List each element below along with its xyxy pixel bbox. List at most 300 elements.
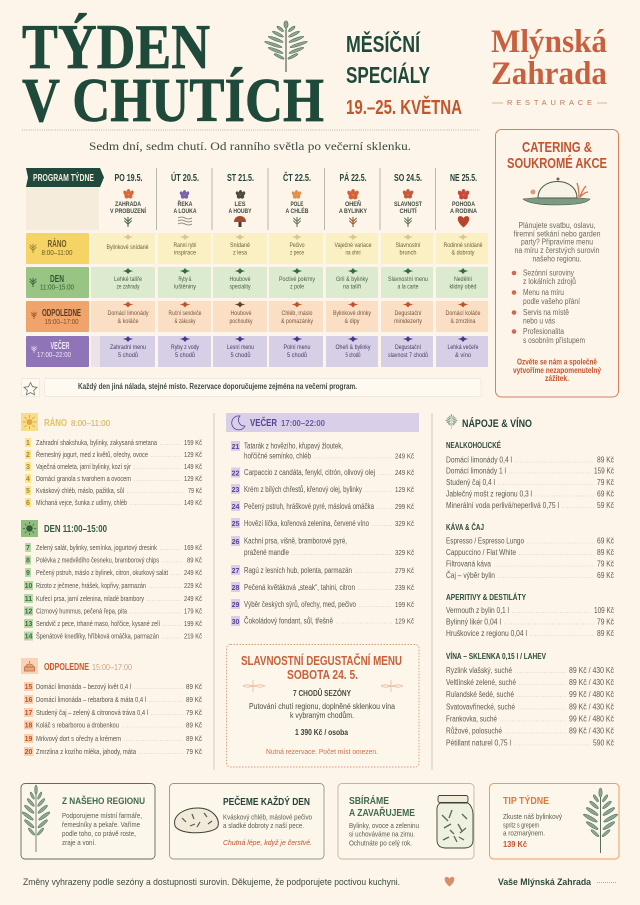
card: tip of the week	[490, 784, 619, 859]
row: afternoon: Degustační	[394, 310, 422, 317]
card: baking	[170, 784, 324, 859]
row: day: DEN	[50, 273, 64, 285]
day headers: ST 21.5.	[227, 172, 254, 184]
tasting description: k vybraným chodům.	[290, 711, 354, 720]
row: evening	[26, 336, 488, 367]
tasting price: 1 390 Kč / osoba	[295, 728, 348, 737]
restaurant logo: Mlýnská	[491, 24, 607, 60]
day headers: ÚT 20.5.	[171, 171, 199, 184]
row: day: Slavnostní menu	[388, 276, 428, 283]
wines: 89 Kč / 430 Kč	[569, 702, 614, 712]
coffee and tea: Espresso / Espresso Lungo	[446, 536, 524, 546]
menu item 8: 89 Kč	[187, 556, 202, 564]
coffee and tea: Filtrovaná káva	[446, 560, 491, 568]
soft drinks: Studený čaj 0,4 l	[446, 478, 495, 487]
soft drinks: 59 Kč	[597, 501, 614, 510]
preserving text	[349, 821, 419, 848]
tip price: 139 Kč	[503, 840, 528, 849]
drinks heading: NÁPOJE & VÍNO	[462, 417, 532, 430]
menu item 6: Míchaná vejce, šunka z udírny, chléb	[36, 498, 127, 507]
row: day	[26, 267, 488, 298]
aperitifs: Hruškovice z regionu 0,04 l	[446, 629, 527, 638]
day theme icons and names: ZAHRADA	[115, 201, 141, 208]
title: TÝDEN	[22, 11, 210, 82]
menu item 1: 1	[26, 440, 30, 447]
row: afternoon: Ruční sendviče	[168, 310, 202, 317]
region text: řemeslníky a pekaře. Vaříme	[62, 820, 140, 829]
wines: 99 Kč / 480 Kč	[569, 714, 614, 724]
menu item 3: Vaječná omeleta, jarní bylinky, kozí sýr	[36, 462, 131, 471]
menu item 30: 129 Kč	[395, 616, 414, 626]
menu item 10: Rizoto z ječmene, hrášek, kopřivy, parmazán	[36, 581, 146, 590]
row: afternoon: minidezerty	[394, 318, 423, 325]
icon: cake	[21, 658, 38, 674]
menu item 9: 249 Kč	[184, 568, 202, 577]
menu item 29: 29	[232, 602, 239, 609]
tip title: TIP TÝDNE	[503, 794, 549, 807]
panel: evening menu	[226, 413, 419, 626]
catering benefits list: podle vašeho přání	[523, 297, 581, 306]
day theme icons and names: A RODINA	[450, 208, 477, 215]
panel: afternoon menu	[21, 658, 202, 756]
tasting title: SOBOTA 24. 5.	[287, 668, 358, 682]
aperitifs: APERITIVY & DESTILÁTY	[446, 592, 526, 602]
menu item 29: Výběr českých sýrů, ořechy, med, pečivo	[244, 600, 356, 609]
menu item 22: 249 Kč	[395, 468, 414, 477]
baking text: Kváskový chléb, máslové pečivo	[223, 812, 312, 822]
aperitifs: Bylinný likér 0,04 l	[446, 618, 501, 626]
preserving title	[349, 794, 415, 819]
catering benefits list: nebo u vás	[523, 316, 555, 326]
menu item 5: 79 Kč	[188, 486, 202, 495]
menu item 17: 79 Kč	[186, 708, 202, 717]
menu item 6: 149 Kč	[184, 498, 202, 507]
day headers: PO 19.5.	[114, 172, 143, 184]
menu item 5: Kváskový chléb, máslo, pažitka, sůl	[36, 486, 124, 495]
menu item 11: Kuřecí prsa, jarní zelenina, mladé brambory	[36, 594, 144, 603]
menu item 21: hořčičné semínko, chléb	[244, 452, 311, 460]
row: day: z pole	[290, 284, 304, 290]
soft drinks: Jablečný mošt z regionu 0,3 l	[446, 490, 532, 498]
catering benefits list: Menu na míru	[523, 288, 564, 297]
menu item 22: 22	[232, 470, 239, 478]
tasting title: SLAVNOSTNÍ DEGUSTAČNÍ MENU	[241, 653, 402, 668]
row: afternoon: & dipy	[344, 318, 360, 325]
row: day: Poctivé pokrmy	[279, 276, 316, 283]
menu item 22: Carpaccio z candáta, fenykl, citrón, olivový olej	[244, 468, 375, 477]
panel: morning menu	[21, 413, 202, 507]
wines: 89 Kč / 430 Kč	[569, 726, 614, 736]
row: morning: Bylinkové snídaně	[106, 244, 149, 251]
catering benefits list	[512, 268, 585, 345]
menu item 16: Domácí limonáda – rebarbora & máta 0,4 l	[36, 695, 146, 704]
evening header: 17:00–22:00	[281, 418, 325, 428]
menu item 29: 199 Kč	[395, 600, 414, 609]
restaurant logo: Zahrada	[491, 56, 607, 92]
row: day: Nedělní	[454, 276, 472, 283]
row: evening: 5 chodů	[175, 351, 195, 359]
row: afternoon: Bylinkové drinky	[333, 310, 372, 317]
row: evening: slavnost 7 chodů	[388, 351, 428, 359]
menu item 13: Sendvič z pece, trhané maso, hořčice, kysané zelí	[36, 619, 161, 628]
menu item 28: 28	[232, 585, 239, 592]
menu item 14: 14	[25, 634, 32, 640]
catering benefits list: s osobním přístupem	[523, 336, 585, 345]
day heading: DEN 11:00–15:00	[44, 524, 107, 535]
row: morning: Vaječné variace	[334, 242, 372, 249]
menu item 26: 26	[232, 539, 239, 546]
row: afternoon: ODPOLEDNE	[42, 307, 81, 319]
panel: day menu	[21, 520, 202, 640]
wines: Ryzlink vlašský, suché	[446, 666, 512, 675]
row: day: Houbové	[230, 276, 251, 283]
menu item 24: 299 Kč	[395, 502, 414, 511]
menu item 26: 329 Kč	[395, 548, 414, 557]
restaurant logo	[491, 24, 607, 107]
region title: Z NAŠEHO REGIONU	[62, 795, 145, 807]
row: evening: & víno	[455, 352, 471, 359]
title: V CHUTÍCH	[22, 67, 324, 135]
panel: catering	[496, 130, 618, 397]
menu item 1: 159 Kč	[184, 438, 202, 447]
preserving text: Bylinky, ovoce a zeleninu	[349, 821, 419, 830]
coffee and tea	[446, 521, 614, 580]
row: evening: VEČER	[50, 339, 70, 352]
row: day: Lehké talíře	[114, 276, 142, 283]
icon: day sun	[21, 520, 38, 537]
aperitifs: 109 Kč	[594, 606, 614, 615]
baking tagline: Chutná lépe, když je čerstvé.	[223, 838, 312, 847]
row: evening: Ryby z vody	[171, 344, 200, 351]
menu item 21: 21	[232, 444, 239, 451]
catering description: na míru z čerstvých surovin	[514, 246, 600, 255]
menu item 10: 229 Kč	[184, 581, 202, 590]
menu item 3: 149 Kč	[184, 462, 202, 471]
row: afternoon: pochoutky	[230, 318, 253, 325]
row: evening: Degustační	[395, 344, 421, 351]
menu item 25: 329 Kč	[395, 519, 414, 528]
preserving text: Ochutnáte po celý rok.	[349, 838, 412, 848]
aperitifs: Vermouth z bylin 0,1 l	[446, 606, 509, 615]
wines: Rulandské šedé, suché	[446, 690, 514, 699]
icon: rosemary sprig	[583, 788, 618, 853]
monthly specials heading: MĚSÍČNÍ	[346, 30, 420, 57]
menu item 20: Zmrzlina z kozího mléka, jahody, máta	[36, 747, 137, 756]
panel: weekly program table	[26, 168, 488, 367]
row: afternoon: & pomazánky	[281, 318, 314, 325]
row: evening: Lehká večeře	[448, 344, 479, 351]
menu item 13: 13	[25, 621, 32, 628]
footer	[23, 877, 617, 888]
menu item 6: 6	[26, 500, 30, 507]
menu item 27: 27	[232, 568, 239, 575]
day theme icons and names: OHEŇ	[345, 199, 361, 208]
menu item 30	[231, 616, 414, 626]
row: morning: Snídaně	[230, 242, 250, 249]
icon: wheat sprig	[21, 785, 51, 852]
menu item 25: 25	[232, 521, 239, 528]
menu item 28: Pečená květáková „steak“, tahini, citron	[244, 583, 355, 592]
menu item 13: 199 Kč	[184, 619, 202, 628]
monthly specials heading: SPECIÁLY	[346, 61, 430, 88]
menu item 26: pražené mandle	[244, 548, 289, 557]
row: morning: RÁNO	[48, 237, 66, 250]
row: evening: Zahradní menu	[110, 344, 146, 351]
wines: Růžové, polosuché	[446, 726, 502, 736]
soft drinks: 79 Kč	[597, 478, 614, 487]
menu item 21: Tatarák z hovězího, křupavý žloutek,	[244, 442, 343, 450]
wines: 99 Kč / 480 Kč	[569, 690, 614, 699]
baking text: a sladké dobroty z naší pece.	[223, 821, 304, 830]
icon: herb	[445, 414, 458, 429]
row: morning: & dobroty	[452, 250, 475, 256]
row: morning: Slavnostní	[396, 242, 421, 249]
tasting title	[241, 653, 402, 682]
menu item 12: 12	[25, 608, 32, 616]
menu item 23: Krém z bílých chřestů, křenový olej, bylinky	[244, 485, 362, 494]
afternoon heading: 15:00–17:00	[92, 662, 132, 672]
menu item 20: 79 Kč	[186, 747, 202, 756]
catering description: party? Připravíme menu	[521, 238, 593, 247]
menu item 27: Ragú z lesních hub, polenta, parmazán	[244, 566, 352, 575]
day headers: ČT 22.5.	[283, 171, 311, 184]
row: evening: 5 chodů	[287, 351, 307, 359]
note bar	[22, 378, 481, 396]
menu item 7: Zelený salát, bylinky, semínka, jogurtový dresink	[36, 543, 157, 552]
tip text: a rozmarýnem.	[503, 828, 545, 838]
tasting description	[249, 702, 396, 720]
region text: Podporujeme místní farmáře,	[62, 811, 142, 820]
afternoon heading: ODPOLEDNE	[44, 662, 89, 673]
row: afternoon: & koláče	[118, 318, 139, 325]
menu item 7: 169 Kč	[184, 543, 202, 552]
row: evening: 5 chodů	[118, 351, 138, 359]
preserving text: si uchováváme na zimu.	[349, 830, 415, 838]
wines: Frankovka, suché	[446, 714, 497, 724]
catering heading: SOUKROMÉ AKCE	[507, 155, 607, 172]
menu item 19: 89 Kč	[186, 734, 202, 743]
menu item 2: 129 Kč	[184, 450, 202, 459]
catering description: Plánujete svatbu, oslavu,	[518, 221, 596, 230]
catering description: našeho regionu.	[532, 254, 582, 264]
menu item 28	[231, 582, 414, 592]
wines: Veltlínské zelené, suché	[446, 678, 516, 687]
coffee and tea: 69 Kč	[597, 571, 614, 580]
row: evening: 5 chodů	[230, 351, 251, 359]
row: morning: na ohni	[346, 250, 361, 256]
menu item 17: Studený čaj – zelený & citronová tráva 0,4 l	[36, 708, 148, 717]
day headers: PÁ 22.5.	[340, 171, 367, 184]
menu item 8: Polévka z medvědího česneku, bramborový chips	[36, 556, 159, 564]
row: evening: 5 chodů	[346, 351, 361, 359]
menu item 5: 5	[26, 488, 30, 495]
day headers	[114, 171, 477, 184]
menu item 17: 17	[25, 710, 32, 717]
soft drinks: NEALKOHOLICKÉ	[446, 440, 501, 450]
morning heading	[44, 416, 110, 429]
row: morning: Rodinné snídaně	[444, 242, 483, 249]
menu item 4: 4	[26, 476, 30, 483]
menu item 18	[24, 720, 202, 730]
menu item 14: 219 Kč	[184, 632, 202, 640]
wines: 89 Kč / 430 Kč	[569, 678, 614, 687]
catering description	[514, 221, 600, 264]
menu item 14: Špenátové knedlíky, hříbková omáčka, parmazán	[36, 632, 159, 640]
card: from our region	[21, 784, 155, 859]
baking title: PEČEME KAŽDÝ DEN	[223, 795, 310, 808]
menu item 18: 18	[25, 722, 32, 730]
menu item 6	[25, 498, 202, 507]
ornaments	[243, 680, 403, 692]
catering call to action: zážitek.	[545, 374, 569, 383]
evening header: VEČER	[250, 416, 278, 429]
menu item 21	[231, 441, 414, 460]
icon: bread	[175, 808, 218, 833]
row: day: a la carte	[398, 284, 419, 290]
day headers: SO 24.5.	[394, 172, 422, 184]
day theme icons and names: V PROBUZENÍ	[110, 206, 147, 215]
menu item 15: Domácí limonáda – bezový květ 0,4 l	[36, 682, 131, 691]
menu item 26	[231, 536, 414, 557]
catering heading	[507, 139, 607, 172]
wines	[446, 651, 614, 748]
aperitifs: 79 Kč	[597, 618, 614, 626]
menu item 11: 11	[25, 596, 32, 603]
row: day: luštěniny	[174, 284, 197, 290]
coffee and tea: 79 Kč	[597, 560, 614, 568]
menu item 27: 279 Kč	[395, 566, 414, 575]
menu item 18: Koláč s rebarborou a drobenkou	[36, 720, 119, 730]
icon: jar	[437, 796, 473, 848]
menu item 2: Řemeslný jogurt, med z květů, ořechy, ovoce	[36, 450, 148, 459]
preserving title: A ZAVAŘUJEME	[349, 806, 415, 819]
catering call to action	[513, 358, 602, 383]
subtitle: Sedm dní, sedm chutí. Od ranního světla po večerní sklenku.	[89, 139, 411, 153]
menu item 19: Mrkvový dort s ořechy a krémem	[36, 734, 121, 743]
row: afternoon: & zmrzlina	[450, 318, 476, 325]
menu item 18: 89 Kč	[186, 720, 202, 730]
menu item 21: 249 Kč	[395, 452, 414, 460]
soft drinks: Domácí limonády 1 l	[446, 466, 506, 476]
menu item 9: 9	[26, 570, 30, 577]
menu item 12: Cizrnový hummus, pečená řepa, pita	[36, 606, 128, 616]
row: afternoon: & zákusky	[174, 318, 196, 325]
row: day: klidný oběd	[450, 284, 477, 290]
row: evening: Lesní menu	[227, 344, 254, 351]
card: preserving	[338, 784, 474, 859]
row: morning: z lesa	[233, 250, 247, 256]
menu item 16: 16	[25, 697, 32, 704]
signature: Vaše Mlýnská Zahrada	[498, 877, 592, 888]
row: evening: Oheň & bylinky	[336, 344, 371, 351]
icon: sun	[21, 413, 38, 431]
soft drinks: 69 Kč	[597, 490, 614, 498]
menu item 24: Pečený pstruh, hráškové pyré, máslová omáčka	[244, 502, 374, 511]
catering benefits list: Sezónní suroviny	[523, 268, 574, 278]
catering benefits list: z lokálních zdrojů	[523, 277, 576, 286]
menu item 9: Pečený pstruh, máslo z bylinek, citron, okurkový salát	[36, 568, 169, 577]
morning heading: 8:00–11:00	[71, 418, 110, 428]
day theme icons and names: A CHLÉB	[286, 206, 309, 215]
evening header	[226, 413, 419, 432]
row: morning: Ranní rybí	[174, 242, 197, 249]
row: day: ze zahrady	[116, 284, 140, 290]
note bar: Každý den jiná nálada, stejné místo. Rezervace doporučujeme zejména na večerní program.	[78, 382, 357, 391]
tasting note: Nutná rezervace. Počet míst omezen.	[266, 747, 378, 756]
menu item 19: 19	[25, 736, 32, 743]
region text: zraje a voní.	[62, 838, 96, 847]
day theme icons and names: LES	[234, 201, 246, 208]
wines: VÍNA – SKLENKA 0,15 l / LAHEV	[446, 651, 546, 661]
catering description: firemní setkání nebo garden	[514, 230, 600, 238]
row: afternoon: Houbové	[230, 310, 252, 317]
tip text	[503, 812, 562, 838]
row: afternoon	[26, 301, 488, 332]
coffee and tea: Čaj – výběr bylin	[446, 571, 495, 580]
catering benefits list: Profesionalita	[523, 327, 565, 336]
menu item 23: 129 Kč	[395, 485, 414, 494]
day theme icons and names: SLAVNOST	[394, 201, 423, 208]
menu item 5	[25, 486, 202, 495]
menu item 15: 15	[25, 684, 32, 691]
row: morning: brunch	[400, 250, 417, 256]
soft drinks: Minerální voda perlivá/neperlivá 0,75 l	[446, 501, 559, 510]
menu item 30: Čokoládový fondant, sůl, třešně	[244, 616, 333, 626]
wines: Svatovavřinecké, suché	[446, 702, 515, 712]
tip text: Zkuste náš bylinkový	[503, 812, 562, 821]
menu item 3: 3	[26, 464, 30, 471]
menu item 15: 89 Kč	[186, 682, 202, 691]
menu item 16: 89 Kč	[186, 695, 202, 704]
monthly specials heading: 19.–25. KVĚTNA	[346, 95, 462, 119]
panel: drinks	[445, 414, 614, 748]
row: day: Gril & bylinky	[336, 276, 369, 283]
row: afternoon: 15:00–17:00	[44, 319, 79, 326]
icon: cloche	[523, 178, 590, 205]
menu item 10: 10	[25, 583, 32, 590]
row: day: 11:00–15:00	[40, 284, 74, 292]
row: evening: Polní menu	[284, 344, 311, 351]
tasting description: Putování chutí regionu, doplněné sklenkou vína	[249, 702, 396, 711]
day theme icons and names: CHUTÍ	[400, 206, 417, 215]
day headers: NE 25.5.	[450, 172, 477, 184]
day theme icons and names: A HOUBY	[228, 208, 252, 215]
aperitifs: 89 Kč	[597, 629, 614, 638]
row: day: Ryby &	[178, 276, 192, 283]
wines: 590 Kč	[593, 738, 614, 748]
tasting subtitle: 7 CHODŮ SEZÓNY	[293, 688, 352, 698]
menu item 7: 7	[26, 545, 30, 552]
menu item 23: 23	[232, 487, 239, 494]
coffee and tea: KÁVA & ČAJ	[446, 521, 484, 532]
restaurant logo: RESTAURACE	[507, 98, 592, 107]
row: morning: inspirace	[174, 250, 196, 256]
menu item 12: 179 Kč	[184, 606, 202, 616]
coffee and tea: Cappuccino / Flat White	[446, 548, 516, 557]
catering call to action: vytvoříme nezapomenutelný	[513, 366, 602, 375]
preserving title: SBÍRÁME	[349, 794, 389, 807]
menu item 15	[24, 682, 202, 691]
catering benefits list: Servis na místě	[523, 308, 569, 317]
day theme icons and names: A BYLINKY	[339, 208, 367, 215]
row: afternoon: Domácí koláče	[446, 310, 481, 317]
day theme icons and names: POLE	[290, 201, 304, 208]
aperitifs	[446, 592, 614, 638]
menu item 25: Hovězí líčka, kořenová zelenina, červené víno	[244, 519, 369, 528]
day theme icons and names: ŘEKA	[178, 199, 193, 208]
icon: herb sprig	[264, 21, 308, 72]
icon: heart	[445, 877, 454, 887]
